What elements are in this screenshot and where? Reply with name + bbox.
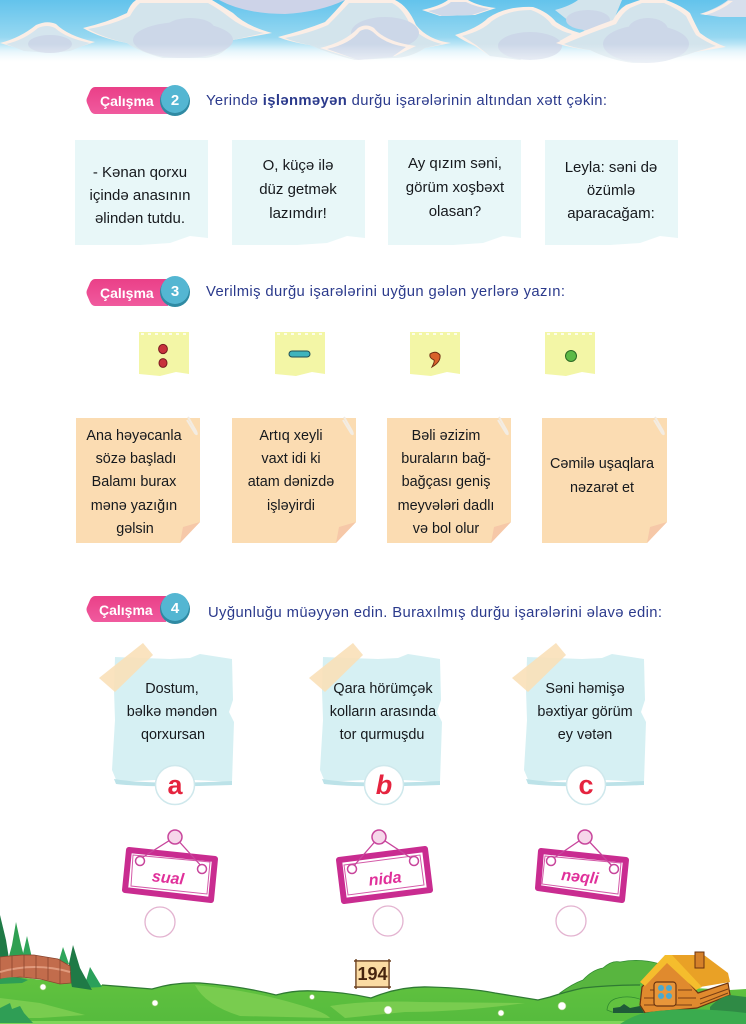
exercise 4 sentence cards xyxy=(99,643,646,804)
sign: sual: sual xyxy=(151,868,185,889)
exercise 3 punctuation notes xyxy=(139,332,595,376)
cloud 6 xyxy=(455,7,580,60)
card c xyxy=(512,643,646,804)
label c xyxy=(566,766,606,804)
cloud 5 small xyxy=(422,0,496,16)
badge: Çalışma 2: Çalışma xyxy=(100,93,154,109)
note 3: bağçası geniş xyxy=(402,474,490,490)
card b: kolların arasında xyxy=(330,704,436,720)
exercise 4 header xyxy=(86,593,662,624)
note 3: və bol olur xyxy=(413,521,479,537)
cloud 3 top xyxy=(219,0,345,14)
tape xyxy=(99,643,153,692)
instruction text: Verilmiş durğu işarələrini uyğun gələn yerlərə yazın: xyxy=(206,284,565,300)
label a: a xyxy=(167,770,183,800)
card a: qorxursan xyxy=(141,727,205,743)
cloud 2 xyxy=(83,0,272,58)
note 1: sözə başladı xyxy=(96,451,176,467)
trees xyxy=(0,915,102,990)
card a: bəlkə məndən xyxy=(127,704,217,720)
badge: Çalışma 4 xyxy=(86,593,190,624)
note 3 xyxy=(387,417,511,543)
badge: Çalışma 2: 2 xyxy=(171,92,179,109)
tape xyxy=(309,643,363,692)
ground xyxy=(0,975,746,1024)
note 3: meyvələri dadlı xyxy=(398,498,494,514)
note 2 xyxy=(232,417,356,543)
badge: Çalışma 4: Çalışma xyxy=(99,602,153,618)
card 3: görüm xoşbəxt xyxy=(406,179,505,196)
sign: nida: nida xyxy=(368,869,403,890)
exercise 3 header xyxy=(86,276,565,307)
note 3: buraların bağ- xyxy=(401,451,491,467)
card a xyxy=(99,643,234,804)
note 1: Ana həyəcanla xyxy=(86,428,182,444)
card 1 xyxy=(75,140,208,245)
card 1: - Kənan qorxu xyxy=(93,164,187,181)
page number sign: 194 xyxy=(357,964,388,984)
note: colon xyxy=(139,332,189,376)
label b xyxy=(364,766,404,804)
card 3 xyxy=(388,140,521,245)
note 2: Artıq xeyli xyxy=(259,428,323,444)
card 2: düz getmək xyxy=(259,181,337,198)
label a xyxy=(156,766,194,804)
note: dash xyxy=(275,332,325,376)
note 1 xyxy=(76,417,200,543)
card 2: O, küçə ilə xyxy=(263,157,333,174)
instruction text: Uyğunluğu müəyyən edin. Buraxılmış durğu işarələrini əlavə edin: xyxy=(208,605,662,621)
card 1: əlindən tutdu. xyxy=(95,210,185,227)
cloud 9 xyxy=(700,0,746,17)
note 3: Bəli əzizim xyxy=(412,428,480,444)
cloud 7 upper xyxy=(555,0,622,34)
exercise 2 cards xyxy=(75,140,678,245)
note 2: vaxt idi ki xyxy=(261,451,321,467)
note 4: Cəmilə uşaqlara xyxy=(550,456,654,472)
badge: Çalışma 4: 4 xyxy=(171,600,180,617)
exercise 2 header xyxy=(86,85,607,116)
page number sign xyxy=(354,959,391,989)
fence xyxy=(0,955,71,984)
note 1: mənə yazığın xyxy=(91,498,177,514)
note: comma xyxy=(410,332,460,376)
card 4 xyxy=(545,140,678,245)
card 4: aparacağam: xyxy=(567,205,655,222)
cloud 4 xyxy=(278,0,451,60)
card c: ey vətən xyxy=(558,727,612,743)
card 3: Ay qızım səni, xyxy=(408,155,502,172)
card b xyxy=(309,643,442,804)
card b: tor qurmuşdu xyxy=(340,727,424,743)
badge: Çalışma 3: 3 xyxy=(171,283,179,300)
flowers xyxy=(40,984,566,1016)
card 4: özümlə xyxy=(587,182,635,199)
card 1: içində anasının xyxy=(90,187,190,204)
badge: Çalışma 3 xyxy=(86,276,190,307)
house xyxy=(640,952,730,1013)
sign: sual xyxy=(125,830,215,900)
note 1: gəlsin xyxy=(116,521,154,537)
small bush near house xyxy=(607,997,642,1012)
label b: b xyxy=(376,770,392,800)
cloud 8 xyxy=(556,0,726,63)
card c: bəxtiyar görüm xyxy=(537,704,633,720)
note 2: işləyirdi xyxy=(267,498,315,514)
bottom strip xyxy=(0,1021,746,1024)
landscape footer xyxy=(0,915,746,1024)
card a: Dostum, xyxy=(145,681,199,697)
card b: Qara hörümçək xyxy=(333,681,433,697)
note 2: atam dənizdə xyxy=(248,474,334,490)
tape xyxy=(512,643,566,692)
card 2: lazımdır! xyxy=(269,205,327,222)
bush behind house xyxy=(560,960,662,996)
sign: nəqli xyxy=(538,830,626,900)
card 2 xyxy=(232,140,365,245)
note 1: Balamı burax xyxy=(92,474,177,490)
instruction text: Yerində işlənməyən durğu işarələrinin altından xətt çəkin: xyxy=(206,93,607,109)
badge: Çalışma 2 xyxy=(86,85,190,116)
light patches xyxy=(0,985,525,1018)
answer circles xyxy=(145,906,586,937)
card 3: olasan? xyxy=(429,203,481,220)
note 4 xyxy=(542,417,667,543)
sign: nida xyxy=(339,830,430,901)
exercise 4 hanging signs xyxy=(125,830,626,901)
badge: Çalışma 3: Çalışma xyxy=(100,285,154,301)
note: period xyxy=(545,332,595,376)
foreground hill xyxy=(710,995,746,1014)
card 4: Leyla: səni də xyxy=(565,159,657,176)
label c: c xyxy=(578,770,594,800)
cloud 1 xyxy=(0,22,95,53)
ground outline xyxy=(102,983,640,1000)
exercise 3 sentence notes xyxy=(76,417,667,543)
grass tuft xyxy=(0,1003,33,1023)
card c: Səni həmişə xyxy=(545,681,625,697)
note 4: nəzarət et xyxy=(570,480,634,496)
sign: nəqli: nəqli xyxy=(560,867,600,888)
sky banner with clouds xyxy=(0,0,746,66)
